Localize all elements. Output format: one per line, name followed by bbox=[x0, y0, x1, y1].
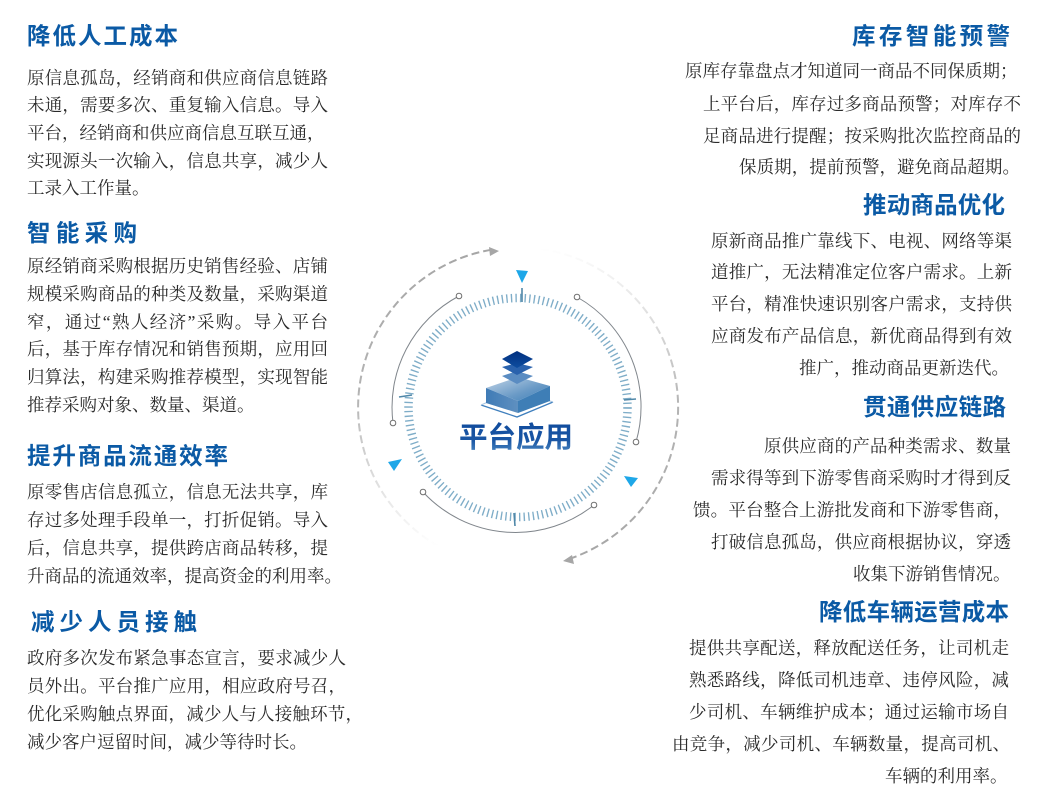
text block: 库存智能预警: 保质期，提前预警，避免商品超期。 bbox=[739, 157, 1020, 177]
text block: 降低人工成本: 平台，经销商和供应商信息互联互通， bbox=[27, 123, 324, 143]
text block: 智能采购: 规模采购商品的种类及数量，采购渠道 bbox=[27, 284, 328, 304]
thin arc: top right bbox=[574, 294, 641, 445]
panel: 减少人员接触 bbox=[27, 609, 363, 752]
panel: 贯通供应链路 bbox=[693, 394, 1011, 584]
heading: 提升商品流通效率: 提升商品流通效率 bbox=[27, 443, 228, 469]
text block: 减少人员接触: 员外出。平台推广应用，相应政府号召， bbox=[27, 676, 346, 696]
panel: 降低车辆运营成本 bbox=[672, 599, 1010, 786]
text block: 降低车辆运营成本: 熟悉路线，降低司机违章、违停风险，减 bbox=[689, 670, 1009, 690]
text block: 贯通供应链路: 原供应商的产品种类需求、数量 bbox=[764, 436, 1011, 456]
text block: 库存智能预警 bbox=[685, 61, 1021, 177]
text block: 智能采购: 后，基于库存情况和销售预期，应用回 bbox=[27, 339, 328, 359]
panel: 库存智能预警 bbox=[685, 23, 1021, 177]
panel: 智能采购 bbox=[27, 220, 328, 415]
text block: 库存智能预警: 原库存靠盘点才知道同一商品不同保质期； bbox=[685, 61, 1018, 81]
text block: 降低车辆运营成本: 少司机、车辆维护成本；通过运输市场自 bbox=[689, 702, 1009, 722]
text block: 降低车辆运营成本 bbox=[672, 638, 1010, 786]
dashed arc arrow: right bbox=[533, 248, 678, 564]
text block: 推动商品优化: 平台，精准快速识别客户需求，支持供 bbox=[711, 294, 1012, 314]
panel: 降低人工成本 bbox=[27, 23, 328, 198]
text block: 智能采购: 窄，通过“熟人经济”采购。导入平台 bbox=[27, 312, 328, 332]
text block: 减少人员接触: 政府多次发布紧急事态宣言，要求减少人 bbox=[27, 648, 346, 668]
title: 平台应用: 平台应用 bbox=[459, 421, 573, 454]
heading: 库存智能预警: 库存智能预警 bbox=[852, 23, 1010, 49]
heading: 减少人员接触: 减少人员接触 bbox=[31, 609, 197, 635]
text block: 智能采购 bbox=[27, 256, 328, 415]
text block: 降低车辆运营成本: 由竞争，减少司机、车辆数量，提高司机、 bbox=[672, 734, 1010, 754]
triangle marker: right bbox=[624, 476, 638, 487]
text block: 提升商品流通效率 bbox=[27, 482, 342, 586]
text block: 智能采购: 推荐采购对象、数量、渠道。 bbox=[27, 395, 254, 415]
text block: 智能采购: 原经销商采购根据历史销售经验、店铺 bbox=[27, 256, 328, 276]
text block: 贯通供应链路: 收集下游销售情况。 bbox=[853, 564, 1010, 584]
dashed arc arrow: left bbox=[358, 247, 499, 546]
text block: 库存智能预警: 足商品进行提醒；按采购批次监控商品的 bbox=[703, 126, 1021, 146]
text block: 智能采购: 归算法，构建采购推荐模型，实现智能 bbox=[27, 367, 328, 387]
text block: 降低人工成本: 实现源头一次输入，信息共享，减少人 bbox=[27, 151, 328, 171]
text block: 贯通供应链路: 馈。平台整合上游批发商和下游零售商， bbox=[693, 500, 1011, 520]
heading: 降低人工成本: 降低人工成本 bbox=[27, 23, 178, 49]
text block: 提升商品流通效率: 原零售店信息孤立，信息无法共享，库 bbox=[27, 482, 328, 502]
text block: 贯通供应链路: 打破信息孤岛，供应商根据协议，穿透 bbox=[711, 532, 1011, 552]
icon: platform layers bbox=[481, 351, 553, 417]
heading: 推动商品优化: 推动商品优化 bbox=[863, 192, 1005, 218]
heading: 降低车辆运营成本: 降低车辆运营成本 bbox=[819, 599, 1009, 625]
text block: 贯通供应链路: 需求得等到下游零售商采购时才得到反 bbox=[711, 468, 1011, 488]
text block: 贯通供应链路 bbox=[693, 436, 1011, 584]
text block: 降低车辆运营成本: 车辆的利用率。 bbox=[885, 766, 1008, 786]
text block: 降低人工成本 bbox=[27, 68, 328, 198]
text block: 降低人工成本: 工录入工作量。 bbox=[27, 178, 150, 198]
text block: 提升商品流通效率: 后，信息共享，提供跨店商品转移，提 bbox=[27, 538, 328, 558]
heading: 智能采购: 智能采购 bbox=[27, 220, 137, 246]
text block: 减少人员接触: 优化采购触点界面，减少人与人接触环节， bbox=[27, 704, 363, 724]
thin arc: bottom bbox=[420, 489, 597, 532]
text block: 降低人工成本: 原信息孤岛，经销商和供应商信息链路 bbox=[27, 68, 328, 88]
text block: 降低人工成本: 未通，需要多次、重复输入信息。导入 bbox=[27, 95, 328, 115]
text block: 提升商品流通效率: 存过多处理手段单一，打折促销。导入 bbox=[27, 510, 328, 530]
thin arc: top left bbox=[390, 293, 462, 426]
heading: 贯通供应链路: 贯通供应链路 bbox=[863, 394, 1006, 420]
text block: 推动商品优化: 道推广，无法精准定位客户需求。上新 bbox=[711, 262, 1012, 282]
text block: 推动商品优化: 原新商品推广靠线下、电视、网络等渠 bbox=[711, 231, 1012, 251]
text block: 推动商品优化: 推广，推动商品更新迭代。 bbox=[799, 358, 1009, 378]
panel: 提升商品流通效率 bbox=[27, 443, 342, 586]
text block: 减少人员接触 bbox=[27, 648, 363, 752]
text block: 推动商品优化: 应商发布产品信息，新优商品得到有效 bbox=[711, 326, 1012, 346]
triangle marker: left bbox=[388, 459, 402, 471]
panel: 推动商品优化 bbox=[711, 192, 1012, 378]
text block: 推动商品优化 bbox=[711, 231, 1012, 378]
text block: 库存智能预警: 上平台后，库存过多商品预警；对库存不 bbox=[703, 94, 1021, 114]
text block: 降低车辆运营成本: 提供共享配送，释放配送任务，让司机走 bbox=[689, 638, 1009, 658]
text block: 减少人员接触: 减少客户逗留时间，减少等待时长。 bbox=[27, 732, 307, 752]
text block: 提升商品流通效率: 升商品的流通效率，提高资金的利用率。 bbox=[27, 566, 342, 586]
triangle marker: top bbox=[516, 270, 528, 283]
tick ring bbox=[399, 288, 636, 526]
